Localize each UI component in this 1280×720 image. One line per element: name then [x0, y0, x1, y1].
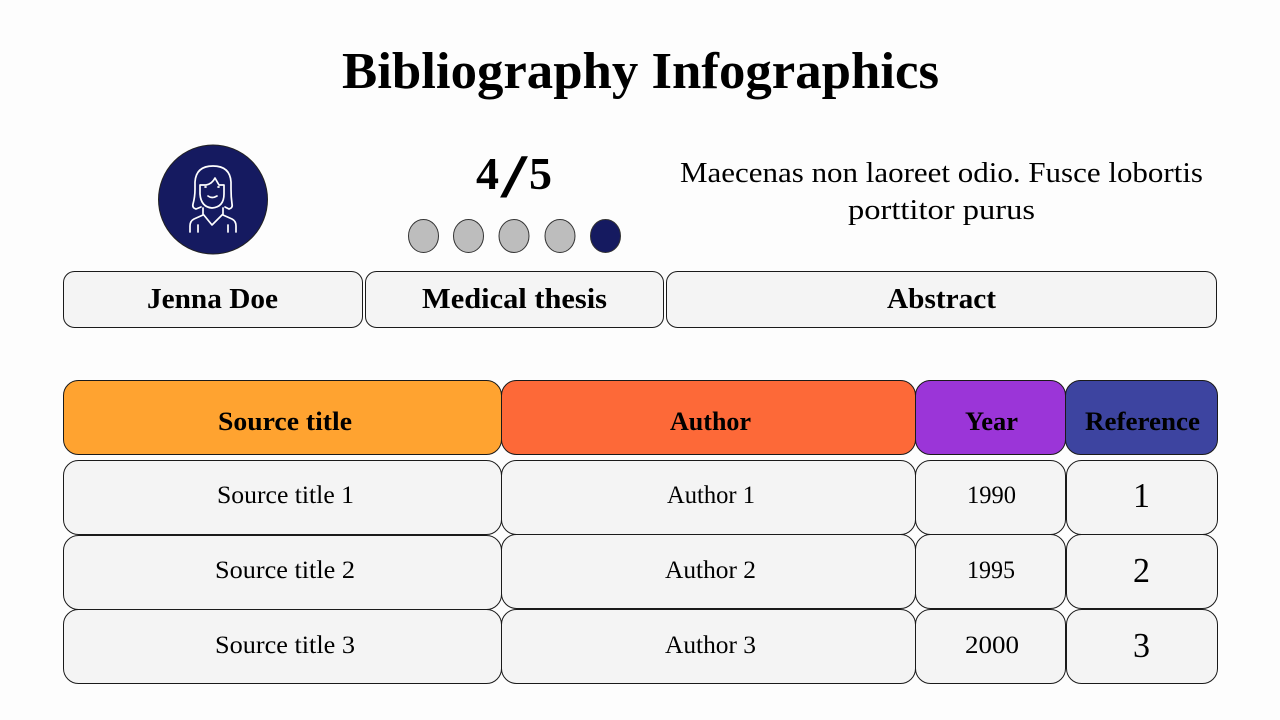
label: document type [366, 272, 664, 328]
rating score: / [499, 144, 529, 211]
label: abstract: Abstract [887, 284, 997, 315]
header: source title: Source title [218, 406, 352, 436]
row 3 [64, 610, 1218, 684]
table [64, 380, 1218, 684]
row 1: 1 [1133, 476, 1150, 515]
label: author name [64, 272, 362, 328]
rating score: 5 [529, 148, 552, 199]
header: reference [1066, 380, 1218, 454]
row 2: Source title 2 [215, 557, 355, 584]
row 3: Author 3 [665, 632, 756, 659]
header: author: Author [670, 406, 751, 436]
abstract text: porttitor purus [848, 194, 1035, 226]
row 3: Source title 3 [215, 632, 355, 659]
header: year [916, 380, 1066, 454]
label: author name: Jenna Doe [147, 284, 278, 315]
row 1: Source title 1 [217, 482, 354, 509]
row 2 [64, 534, 1218, 610]
row 2: Author 2 [665, 557, 756, 584]
row 1: 1990 [967, 482, 1016, 509]
abstract text: Maecenas non laoreet odio. Fusce lobortis [680, 157, 1203, 189]
row 1: Author 1 [667, 482, 755, 509]
title: Bibliography Infographics [342, 43, 939, 100]
abstract text [680, 157, 1203, 226]
label: abstract [666, 272, 1216, 328]
rating score: 4 [476, 148, 499, 199]
icon: author avatar [158, 145, 268, 254]
header: year: Year [965, 406, 1018, 436]
header: author [502, 380, 916, 454]
row 2: 2 [1133, 551, 1150, 590]
header: source title [64, 380, 502, 454]
header: reference: Reference [1085, 406, 1200, 436]
rating dots [408, 220, 620, 252]
row 2: 1995 [967, 557, 1015, 584]
rating score [476, 144, 552, 211]
row 1 [64, 460, 1218, 534]
label: document type: Medical thesis [422, 284, 607, 315]
row 3: 3 [1133, 626, 1150, 665]
row 3: 2000 [965, 632, 1019, 659]
